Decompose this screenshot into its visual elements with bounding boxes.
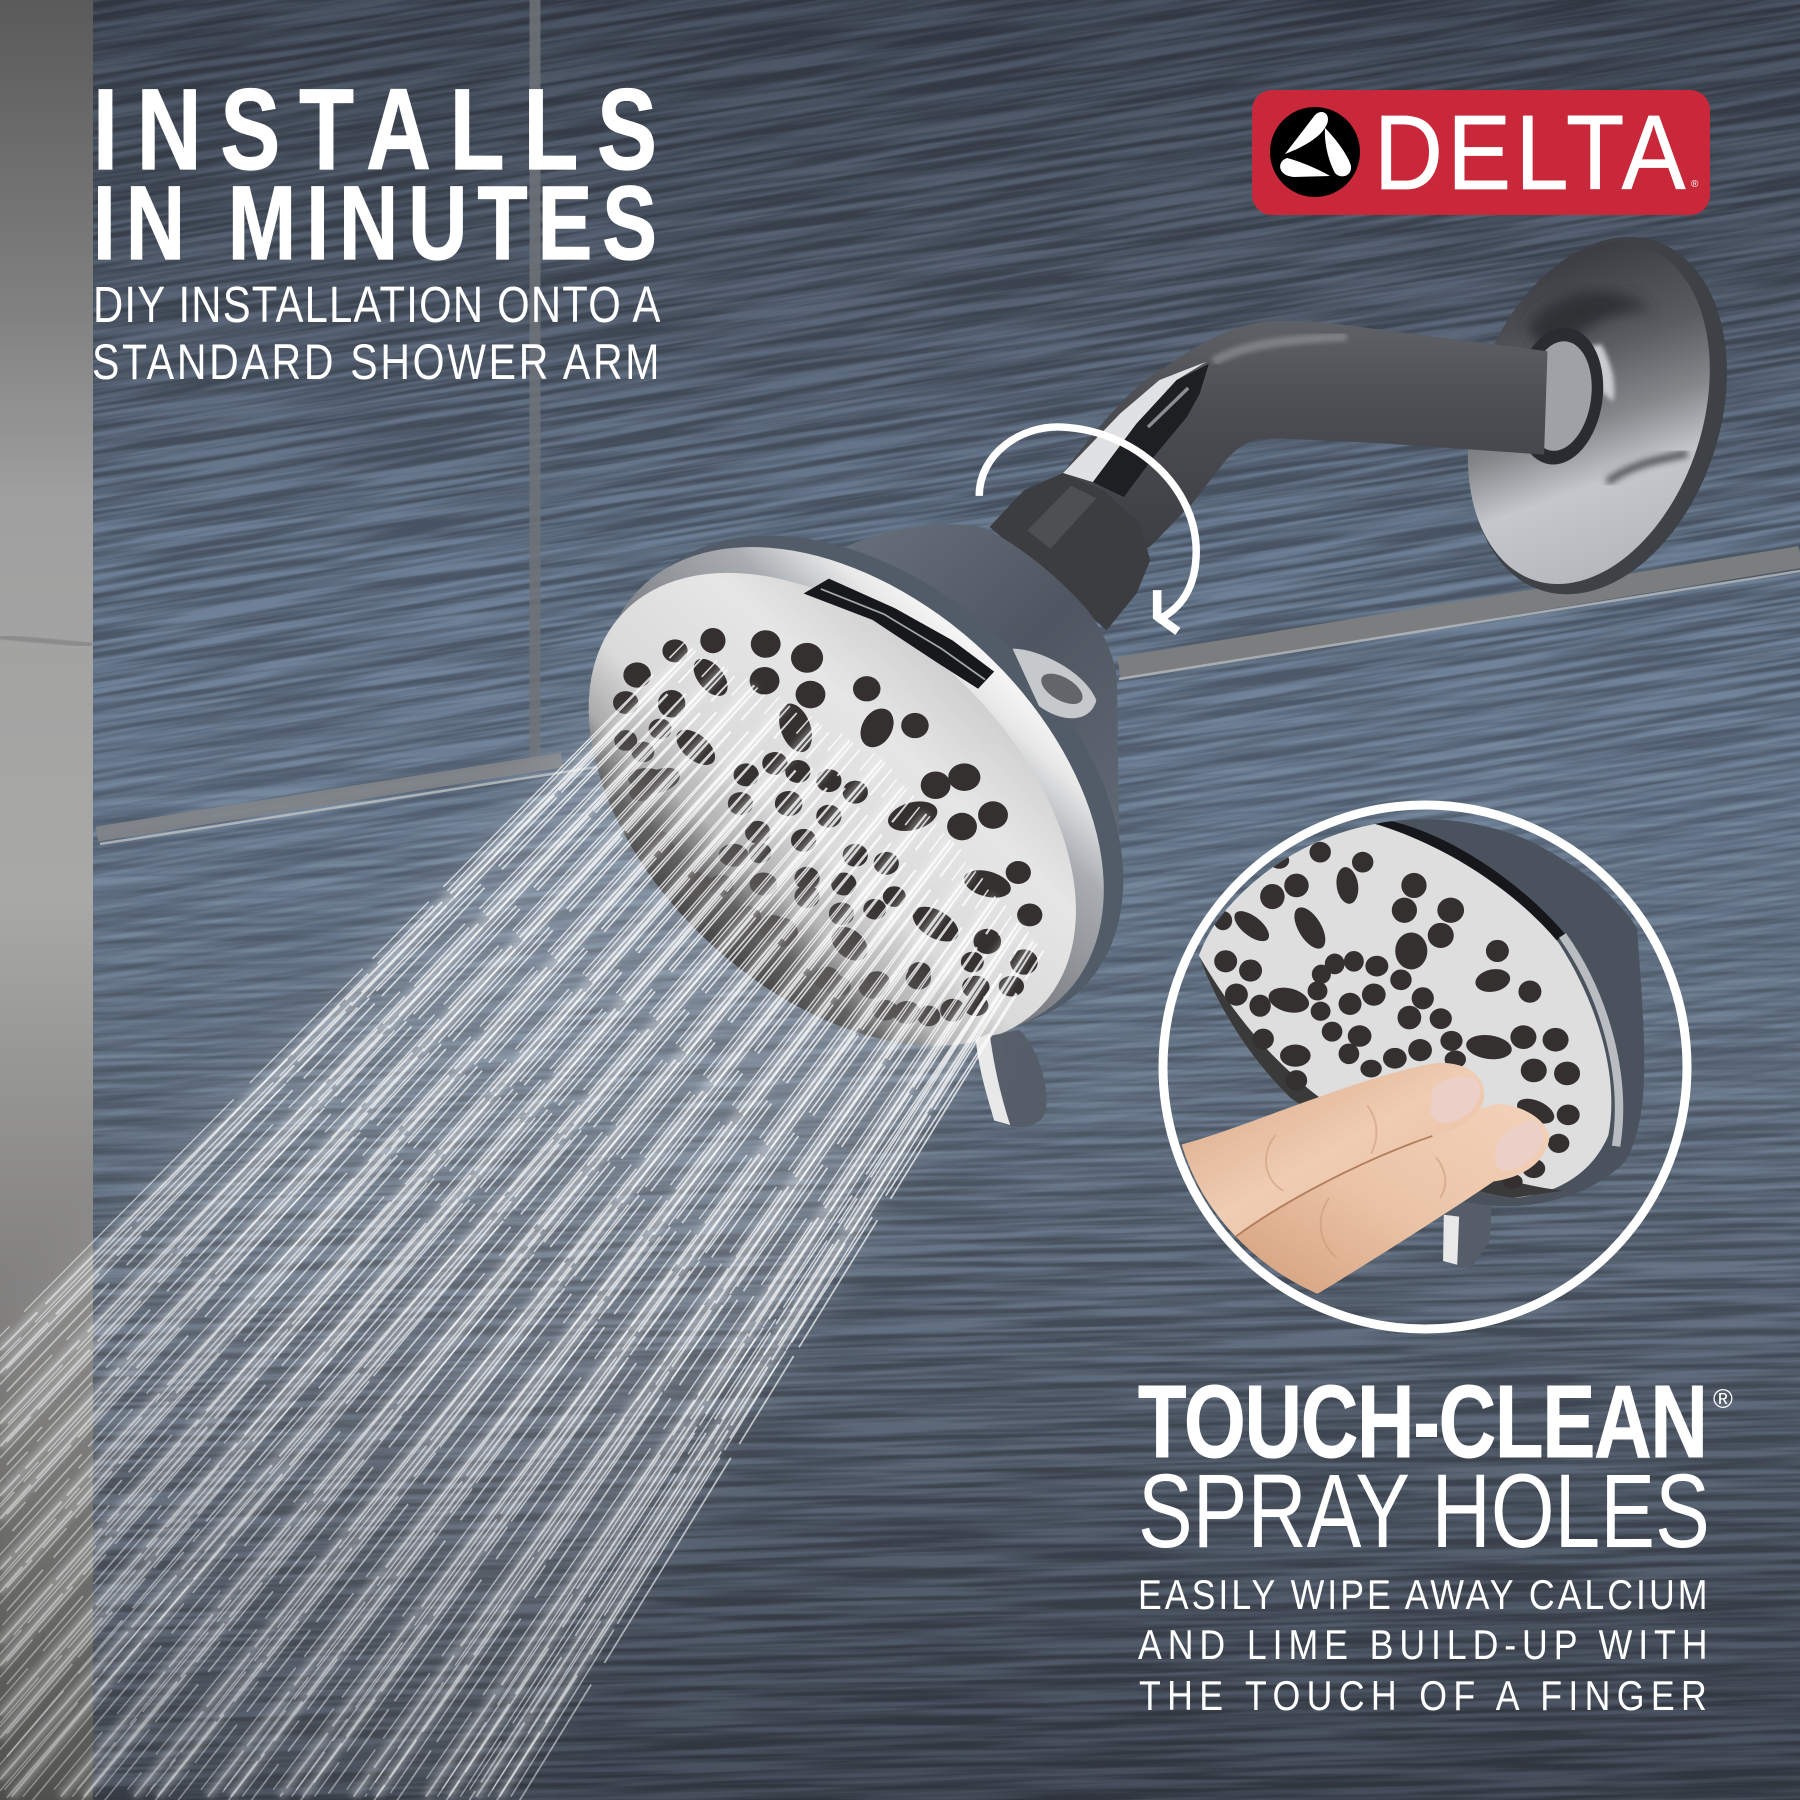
rotation arrow bbox=[979, 427, 1196, 631]
inset circle: finger wiping spray holes bbox=[1163, 805, 1687, 1329]
body line 1: EASILY WIPE AWAY CALCIUM bbox=[1138, 1572, 1707, 1619]
offset water streaks D bbox=[0, 642, 1026, 1790]
logo wordmark: DELTA bbox=[1374, 94, 1686, 212]
registered mark: ® bbox=[1713, 1384, 1733, 1414]
heading: touch-clean spray holes bbox=[1138, 1365, 1733, 1720]
spray holes bbox=[613, 628, 1042, 1026]
body line 2: AND LIME BUILD-UP WITH bbox=[1138, 1622, 1708, 1669]
water spray bbox=[0, 642, 1044, 1800]
shower arm bbox=[1063, 321, 1548, 574]
selector lever bbox=[976, 1030, 1046, 1127]
wall plate flange bbox=[1426, 203, 1771, 628]
heading line 1: INSTALLS bbox=[93, 65, 657, 194]
logo registered mark: ® bbox=[1691, 179, 1699, 190]
logo mark bbox=[1270, 107, 1360, 197]
subheading line 1: DIY INSTALLATION ONTO A bbox=[93, 276, 660, 333]
delta logo badge bbox=[1252, 90, 1710, 215]
heading bold line: TOUCH-CLEAN bbox=[1138, 1365, 1708, 1479]
heading: installs in minutes bbox=[92, 65, 660, 390]
inset ring bbox=[1163, 805, 1687, 1329]
inset shower head bbox=[1199, 813, 1644, 1269]
heading line 2: IN MINUTES bbox=[93, 164, 657, 281]
offset water streaks C bbox=[7, 658, 1044, 1800]
body line 3: THE TOUCH OF A FINGER bbox=[1139, 1673, 1707, 1720]
fine water streaks B bbox=[0, 651, 1037, 1797]
heading regular line: SPRAY HOLES bbox=[1138, 1452, 1710, 1569]
subheading line 2: STANDARD SHOWER ARM bbox=[92, 334, 659, 390]
fingers bbox=[1182, 1063, 1549, 1296]
inset spray holes bbox=[1214, 842, 1580, 1189]
soft blurred water beams bbox=[0, 649, 1033, 1797]
fine water streaks A bbox=[0, 649, 1033, 1797]
shower head body bbox=[499, 438, 1219, 1138]
